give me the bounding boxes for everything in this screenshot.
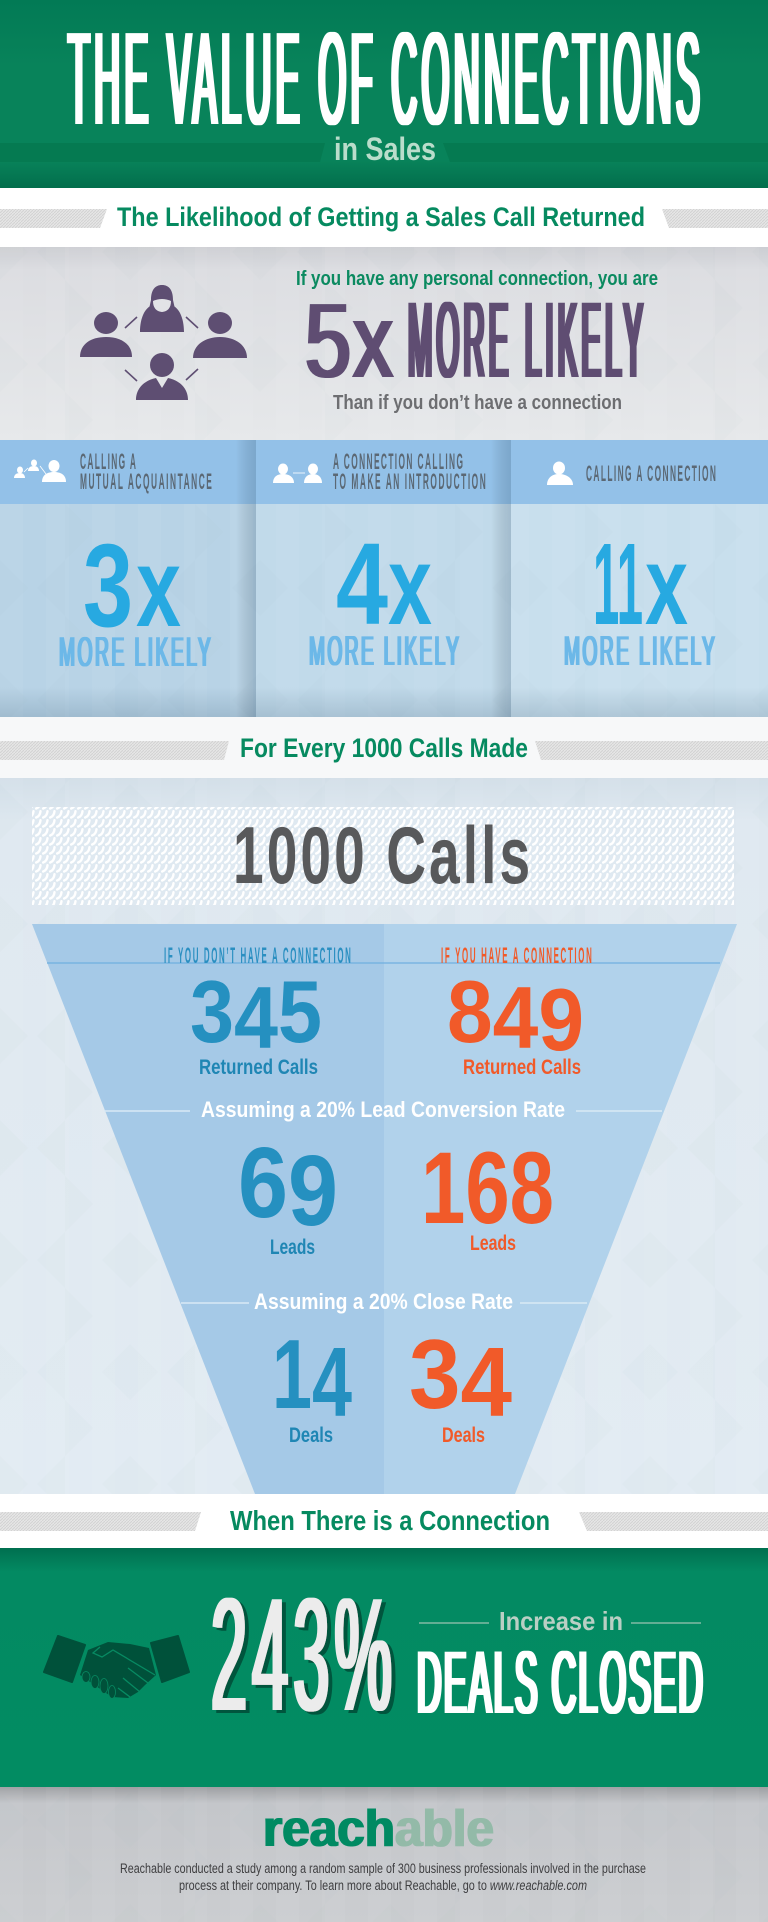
- stat: 14 deals: Deals: [289, 1424, 333, 1447]
- header banner: [0, 0, 768, 188]
- stat: 168 leads: Leads: [470, 1232, 516, 1255]
- section heading: every 1000 calls: For Every 1000 Calls Made: [240, 733, 528, 763]
- column: mutual acquaintance: CALLING A: [80, 449, 136, 474]
- panel: 243 percent increase: [0, 1548, 768, 1787]
- column: mutual acquaintance: [14, 449, 212, 675]
- stat: 849 returned calls: [447, 962, 584, 1079]
- section heading: likelihood: [0, 188, 768, 247]
- column: mutual acquaintance: MUTUAL ACQUAINTANCE: [80, 469, 212, 494]
- column: mutual acquaintance: 3: [83, 520, 133, 652]
- column label: no connection: IF YOU DON’T HAVE A CONNECTION: [164, 943, 351, 968]
- column: calling a connection: x: [645, 523, 688, 648]
- stat: 345 returned calls: 4: [234, 968, 278, 1067]
- stat: 69 leads: 6: [238, 1127, 294, 1239]
- panel: three comparison columns: [0, 440, 768, 717]
- section heading: every 1000 calls: [0, 717, 768, 778]
- stat: 69 leads: [238, 1127, 338, 1259]
- stat: 849 returned calls: Returned Calls: [463, 1056, 581, 1079]
- column: introduction: MORE LIKELY: [309, 626, 459, 674]
- column: introduction: x: [388, 523, 432, 648]
- text: close rate assumption: Assuming a 20% Close Rate: [254, 1289, 513, 1314]
- column: introduction: [273, 449, 486, 674]
- stat: 849 returned calls: 9: [538, 970, 584, 1069]
- panel: sales funnel: [0, 778, 768, 1494]
- column: introduction: 4: [336, 519, 388, 649]
- text: study note: [120, 1861, 646, 1893]
- text: study note: Reachable conducted a study among a random sample of 300 business professionals involved in the purchase: [120, 1861, 646, 1876]
- stat: 345 returned calls: 3: [190, 962, 239, 1061]
- stat: 69 leads: Leads: [270, 1236, 315, 1259]
- stat: 5x more likely: MORE LIKELY: [408, 279, 643, 400]
- subtitle: in Sales: [334, 131, 436, 167]
- funnel shape: [32, 924, 737, 1494]
- text: increase in: Increase in: [499, 1606, 623, 1636]
- 1000 calls box: [32, 807, 734, 905]
- column label: connection: IF YOU HAVE A CONNECTION: [441, 943, 592, 968]
- text: no connection: Than if you don’t have a connection: [333, 392, 622, 414]
- stat: 345 returned calls: 5: [278, 962, 322, 1061]
- logo: reachable: reachable: [263, 1800, 494, 1858]
- stat: 5x more likely: x: [353, 282, 393, 400]
- stat: 69 leads: 9: [288, 1135, 338, 1247]
- title: THE VALUE OF CONNECTIONS: [68, 5, 700, 153]
- column: mutual acquaintance: MORE LIKELY: [59, 627, 211, 675]
- stat: 5x more likely: 5: [305, 282, 351, 400]
- stat: 849 returned calls: 8: [447, 962, 496, 1061]
- text: study note: process at their company. To learn more about Reachable, go to www.reachable.com: [179, 1878, 587, 1893]
- text: personal connection: If you have any personal connection, you are: [296, 268, 658, 290]
- icon: introduction: [273, 464, 322, 483]
- stat: 34 deals: [409, 1319, 512, 1447]
- section heading: when there is a connection: [0, 1494, 768, 1548]
- text: lead conversion assumption: Assuming a 20% Lead Conversion Rate: [201, 1097, 565, 1122]
- stat: 34 deals: 3: [409, 1319, 464, 1429]
- 1000 calls box: 1000 Calls: [233, 809, 530, 901]
- stat: 14 deals: [272, 1319, 352, 1447]
- stat: 14 deals: 4: [312, 1327, 352, 1437]
- stat: 34 deals: Deals: [442, 1424, 485, 1447]
- footer: [0, 1787, 768, 1922]
- icon: connected people: [80, 285, 247, 400]
- column: introduction: TO MAKE AN INTRODUCTION: [333, 469, 486, 494]
- column: calling a connection: [547, 461, 716, 674]
- stat: 168 leads: 168: [421, 1131, 554, 1245]
- column: calling a connection: 11: [593, 519, 643, 649]
- section heading: when there is a connection: When There is a Connection: [230, 1505, 550, 1536]
- stat: 345 returned calls: [190, 962, 322, 1079]
- stat: 345 returned calls: Returned Calls: [199, 1056, 318, 1079]
- text: deals closed: DEALS CLOSED: [417, 1634, 703, 1733]
- stat: 34 deals: 4: [460, 1327, 512, 1437]
- stat: 849 returned calls: 4: [493, 968, 538, 1067]
- column: calling a connection: MORE LIKELY: [564, 626, 715, 674]
- column: mutual acquaintance: x: [136, 525, 181, 650]
- panel: five times more likely: [0, 247, 768, 440]
- stat: 243 percent: 243%: [211, 1564, 392, 1744]
- icon: mutual acquaintance: [14, 460, 66, 482]
- stat: 14 deals: 1: [272, 1319, 327, 1429]
- icon: single contact: [547, 462, 573, 485]
- stat: 5x more likely: [305, 279, 643, 400]
- icon: handshake: [44, 1636, 189, 1698]
- section heading: likelihood: The Likelihood of Getting a Sales Call Returned: [117, 202, 645, 232]
- column: introduction: A CONNECTION CALLING: [333, 449, 463, 474]
- column: calling a connection: CALLING A CONNECTION: [586, 461, 716, 486]
